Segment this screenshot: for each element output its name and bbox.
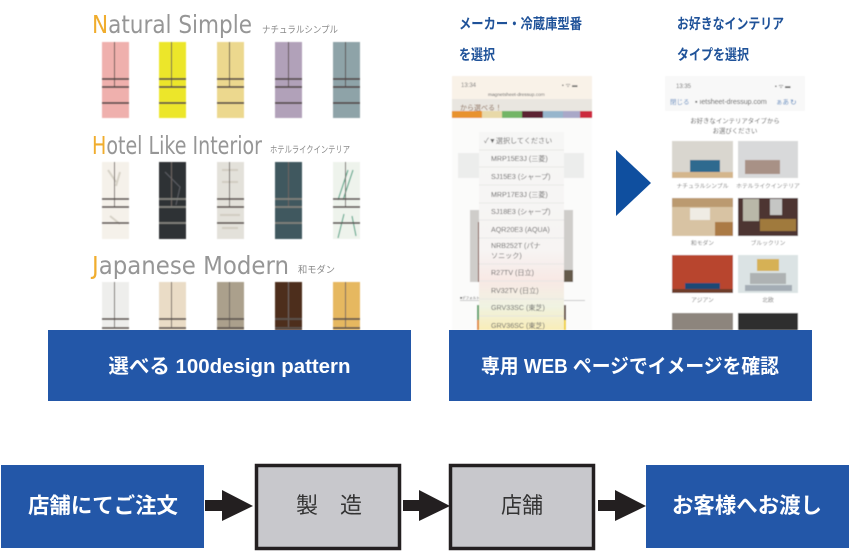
panel: phone screenshot, interior selection: ▪ ıetsheet-dressup.com	[695, 99, 767, 106]
photo grid: アジアン	[691, 297, 714, 304]
dropdown list: NRB252T (パナ	[491, 242, 541, 250]
flow step: manufacturing	[256, 466, 400, 548]
dropdown list: ソニック)	[491, 252, 522, 260]
panel: phone screenshot, interior selection: 13:35	[676, 84, 692, 90]
panel: design patterns	[90, 10, 360, 330]
heading: Natural Simple: ナチュラルシンプル	[262, 25, 338, 36]
arrow: to customer	[598, 490, 646, 521]
photo grid: ホテルライクインテリア	[736, 183, 800, 190]
dropdown list: R27TV (日立)	[491, 268, 534, 277]
fridges: Japanese Modern row	[102, 282, 360, 330]
flow step: handover to customer	[646, 465, 849, 548]
dropdown list: MRP15E3J (三菱)	[491, 154, 548, 163]
photo grid: 北欧	[762, 296, 774, 304]
photo grid	[672, 141, 800, 330]
heading: Japanese Modern: 和モダン	[298, 264, 335, 276]
panel: blue caption left	[48, 330, 411, 401]
heading: select interior type, second line: タイプを選択	[677, 47, 749, 64]
fridges: Hotel Like Interior row	[102, 162, 360, 239]
panel: blue caption right: 専用 WEB ページでイメージを確認	[481, 355, 779, 378]
flow step: handover to customer: お客様へお渡し	[672, 494, 822, 518]
panel: phone screenshot, model selection: 13:34	[461, 83, 477, 89]
dropdown list: AQR20E3 (AQUA)	[491, 226, 550, 234]
heading: select maker and model, second line: を選択	[459, 47, 495, 64]
fridges: Natural Simple row	[102, 42, 360, 118]
dropdown list: MRP17E3J (三菱)	[491, 190, 548, 199]
panel: phone screenshot, interior selection	[665, 76, 805, 330]
flow step: order at store: 店舗にてご注文	[28, 493, 178, 518]
panel: phone screenshot, model selection: ▪ ᯤ ▬	[562, 83, 578, 89]
panel: phone screenshot, model selection: から選べる！	[460, 103, 502, 112]
arrow: to manufacturing	[205, 490, 253, 521]
heading: Japanese Modern: Japanese Modern	[90, 251, 289, 280]
photo grid: ナチュラルシンプル	[676, 183, 729, 190]
flow step: manufacturing: 製 造	[296, 493, 362, 518]
dropdown list: GRV36SC (東芝)	[491, 321, 545, 330]
panel: phone screenshot, interior selection: お選びください	[713, 126, 757, 135]
flow step: store: 店舗	[501, 493, 543, 518]
arrow: blue triangle	[616, 150, 651, 216]
panel: phone screenshot, interior selection: ↻	[790, 98, 797, 107]
photo grid: ブルックリン	[751, 239, 786, 247]
dropdown list: ✓▼選択してください	[484, 136, 552, 145]
photo grid: 和モダン	[691, 239, 714, 247]
arrow: to store	[403, 490, 450, 521]
panel: blue caption right	[449, 330, 812, 401]
dropdown list: RV32TV (日立)	[491, 286, 539, 295]
panel: phone screenshot, interior selection: ぁあ	[776, 98, 789, 106]
dropdown list: SJ15E3 (シャープ)	[491, 173, 550, 181]
panel: blue caption left: 選べる 100design pattern	[108, 355, 350, 378]
heading: select maker and model: メーカー・冷蔵庫型番	[459, 16, 582, 33]
heading: Hotel Like Interior: Hotel Like Interior	[92, 131, 263, 160]
panel: phone screenshot, interior selection: ▪ ᯤ ▬	[775, 84, 791, 90]
flow step: store	[450, 466, 594, 548]
heading: Hotel Like Interior: ホテルライクインテリア	[270, 145, 350, 156]
dropdown list	[479, 132, 564, 330]
flow step: order at store	[1, 465, 204, 548]
panel: phone screenshot, model selection	[452, 76, 592, 330]
dropdown list: SJ18E3 (シャープ)	[491, 208, 550, 216]
panel: phone screenshot, model selection: ■デフォルト	[460, 295, 480, 300]
heading: select interior type: お好きなインテリア	[677, 16, 784, 33]
panel: phone screenshot, model selection: magnetsheet-dressup.com	[488, 92, 545, 98]
panel: phone screenshot, interior selection: 閉じる	[670, 98, 690, 106]
panel: phone screenshot, interior selection: お好きなインテリアタイプから	[690, 116, 780, 125]
dropdown list: GRV33SC (東芝)	[491, 303, 545, 312]
heading: Natural Simple: Natural Simple	[92, 10, 252, 39]
